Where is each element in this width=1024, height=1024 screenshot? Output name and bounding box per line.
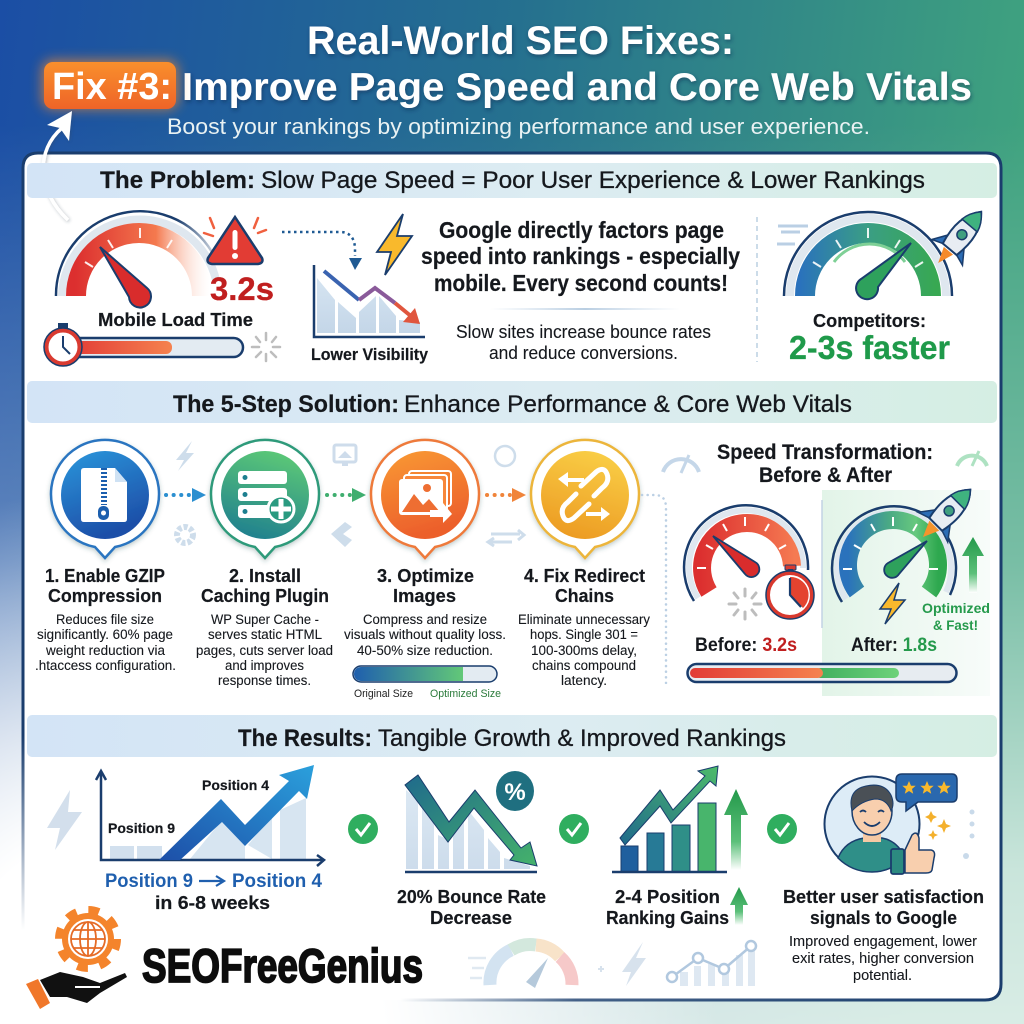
text: google factors: mobile. Every second counts! <box>434 270 728 296</box>
title: Improve Page Speed and Core Web Vitals <box>182 66 972 109</box>
step 3 body: visuals without quality loss. <box>344 627 506 642</box>
step 2 title: 2. Install <box>229 566 301 586</box>
step 2 <box>196 440 333 688</box>
label: satisfaction: signals to Google <box>810 907 957 928</box>
label: ranking <box>606 887 729 928</box>
icon: spinner before <box>729 589 761 619</box>
before after bar <box>688 664 956 682</box>
icon: warning <box>204 217 266 264</box>
step 3 title: Images <box>393 586 456 606</box>
step 4 body: hops. Single 301 = <box>530 627 638 642</box>
step 1 title <box>45 566 165 606</box>
heading: speed transformation: Speed Transformation: <box>717 441 933 464</box>
heading: speed transformation <box>717 441 933 487</box>
step 2 body: and improves <box>225 658 304 673</box>
icon: zip file <box>51 440 159 558</box>
arrow 1 to 2 <box>166 488 206 502</box>
label: after: After: 1.8s <box>851 635 937 656</box>
text: position change: in 6-8 weeks <box>155 893 270 913</box>
check 1 <box>348 814 378 844</box>
step 2 title: Caching Plugin <box>201 586 329 606</box>
icon: percent <box>496 771 534 811</box>
step 3 body: Compress and resize <box>363 612 487 627</box>
step 4 <box>518 440 650 688</box>
step 4 body <box>518 612 650 688</box>
logo: SEOFreeGenius <box>26 910 423 1009</box>
text: engagement <box>789 934 977 984</box>
step 2 body: serves static HTML <box>208 627 322 642</box>
panel: results <box>27 715 997 988</box>
icon: spinner <box>252 333 280 361</box>
label: position 9: Position 9 <box>108 820 175 836</box>
check 2 <box>559 814 589 844</box>
main card <box>23 153 1001 1000</box>
icon: rating bubble <box>896 774 957 811</box>
panel: the problem <box>27 163 997 366</box>
chart: position growth <box>96 765 324 866</box>
icon: gear and globe <box>59 910 117 968</box>
progress bar with stopwatch <box>44 323 243 366</box>
icon: server cache <box>211 440 319 558</box>
title <box>182 19 972 109</box>
heading: speed transformation: Before & After <box>759 464 892 487</box>
curved arrow to badge <box>43 111 72 220</box>
value: 2-3s faster: 2-3s faster <box>789 329 950 366</box>
text: engagement: potential. <box>853 968 912 984</box>
gauge: before <box>684 505 808 601</box>
chart: bounce rate <box>405 775 537 872</box>
label: optimized: Optimized <box>922 600 990 616</box>
icon: hand <box>26 972 127 1009</box>
panel: 5-step solution <box>27 381 997 700</box>
label: competitors: Competitors: <box>813 311 926 331</box>
text: bounce rates: Slow sites increase bounce rates <box>456 322 711 342</box>
step 4 body: 100-300ms delay, <box>531 643 637 658</box>
step 1 body: weight reduction via <box>45 643 165 658</box>
heading: the problem: The Problem: <box>100 167 255 194</box>
dotted arrow <box>282 232 362 270</box>
heading: results: The Results: <box>238 725 372 752</box>
icon: lightning <box>377 214 412 275</box>
text: position change <box>105 871 322 913</box>
step 4 title <box>524 566 645 606</box>
step 4 body: chains compound <box>532 658 636 673</box>
label: satisfaction: Better user satisfaction <box>783 886 984 907</box>
gauge: competitors <box>777 212 952 299</box>
panel: speed transformation <box>663 441 990 696</box>
text: position change: Position 4 <box>232 871 322 892</box>
gauge: after <box>832 506 956 602</box>
title: Real-World SEO Fixes: <box>307 19 734 63</box>
heading: the problem <box>27 163 997 198</box>
chart: lower visibility <box>314 265 425 337</box>
step 1 <box>35 440 176 673</box>
step 3 title: 3. Optimize <box>377 566 474 586</box>
step 1 body <box>35 612 176 673</box>
label: before: Before: 3.2s <box>695 635 797 656</box>
size bar <box>353 666 501 700</box>
label: ranking: Ranking Gains <box>606 908 729 928</box>
badge: Fix #3: Fix #3: <box>52 66 172 108</box>
text: bounce rates: and reduce conversions. <box>489 343 678 363</box>
pale green after panel <box>822 490 990 696</box>
label: optimized <box>922 600 990 633</box>
step 1 body: Reduces file size <box>56 612 154 627</box>
step 2 title <box>201 566 329 606</box>
label: mobile load time: Mobile Load Time <box>98 310 253 330</box>
step 2 body: WP Super Cache - <box>211 612 319 627</box>
size bar: Original Size <box>354 688 413 700</box>
heading: results: Tangible Growth & Improved Rankings <box>378 725 786 752</box>
step 4 title: Chains <box>555 586 614 606</box>
gauge: mobile load time <box>56 211 216 307</box>
label: optimized: & Fast! <box>933 617 978 633</box>
heading: solution: Enhance Performance & Core Web Vitals <box>404 391 852 418</box>
icon: broken chain <box>531 440 639 558</box>
icon: percent: % <box>504 779 526 806</box>
step 3 <box>344 440 506 700</box>
step 4 title: 4. Fix Redirect <box>524 566 645 586</box>
value: 3.2s: 3.2s <box>210 271 274 307</box>
icon: small up arrow <box>730 887 748 925</box>
step 3 body: 40-50% size reduction. <box>357 643 493 658</box>
icon: up arrow <box>962 537 984 593</box>
wordmark: SEOFreeGenius <box>142 939 423 992</box>
label: satisfaction <box>783 886 984 928</box>
label: lower visibility: Lower Visibility <box>311 346 429 364</box>
heading: the problem: Slow Page Speed = Poor User Experience & Lower Rankings <box>261 167 925 194</box>
text: google factors: speed into rankings - especially <box>421 243 740 269</box>
icon: rocket after <box>908 475 985 552</box>
heading: solution: The 5-Step Solution: <box>173 391 399 418</box>
icon: images <box>371 440 479 558</box>
arrow 2 to 3 <box>327 488 366 502</box>
text: engagement: Improved engagement, lower <box>789 934 977 950</box>
text: position change: Position 9 <box>105 871 193 892</box>
step 4 body: Eliminate unnecessary <box>518 612 650 627</box>
faint lightning <box>47 790 82 850</box>
step 2 body: pages, cuts server load <box>196 643 333 658</box>
label: bounce: 20% Bounce Rate <box>397 887 546 907</box>
faint bottom icons <box>468 941 756 988</box>
icon: thumbs up <box>891 833 935 874</box>
text: engagement: exit rates, higher conversion <box>792 951 974 967</box>
heading: solution <box>27 381 997 423</box>
text: bounce rates <box>456 322 711 363</box>
icon: rocket <box>923 199 997 276</box>
label: bounce <box>397 887 546 928</box>
check 3 <box>767 814 797 844</box>
step 1 body: significantly. 60% page <box>37 627 173 642</box>
step 3 title <box>377 566 474 606</box>
icon: stopwatch <box>766 565 814 619</box>
step 2 body: response times. <box>218 673 311 688</box>
faint icons <box>176 441 524 547</box>
label: bounce: Decrease <box>430 908 512 928</box>
chart: ranking gains <box>612 766 748 872</box>
text: google factors: Google directly factors page <box>439 217 724 243</box>
step 2 body <box>196 612 333 688</box>
size bar: Optimized Size <box>430 688 501 700</box>
icon: lightning after <box>880 583 905 624</box>
arrow 3 to 4 <box>487 488 526 502</box>
step 1 title: Compression <box>48 586 162 606</box>
text: google factors <box>421 217 740 296</box>
heading: results <box>27 715 997 757</box>
step 4 body: latency. <box>561 673 607 688</box>
step 1 title: 1. Enable GZIP <box>45 566 165 586</box>
step 3 body <box>344 612 506 658</box>
label: position 4: Position 4 <box>202 777 269 793</box>
label: ranking: 2-4 Position <box>615 887 720 907</box>
subtitle: Boost your rankings by optimizing performance and user experience. <box>167 114 870 139</box>
icon: sparkles <box>925 811 951 840</box>
icon: happy user <box>824 776 920 872</box>
step 1 body: .htaccess configuration. <box>35 658 176 673</box>
small gauge icons <box>663 451 987 473</box>
